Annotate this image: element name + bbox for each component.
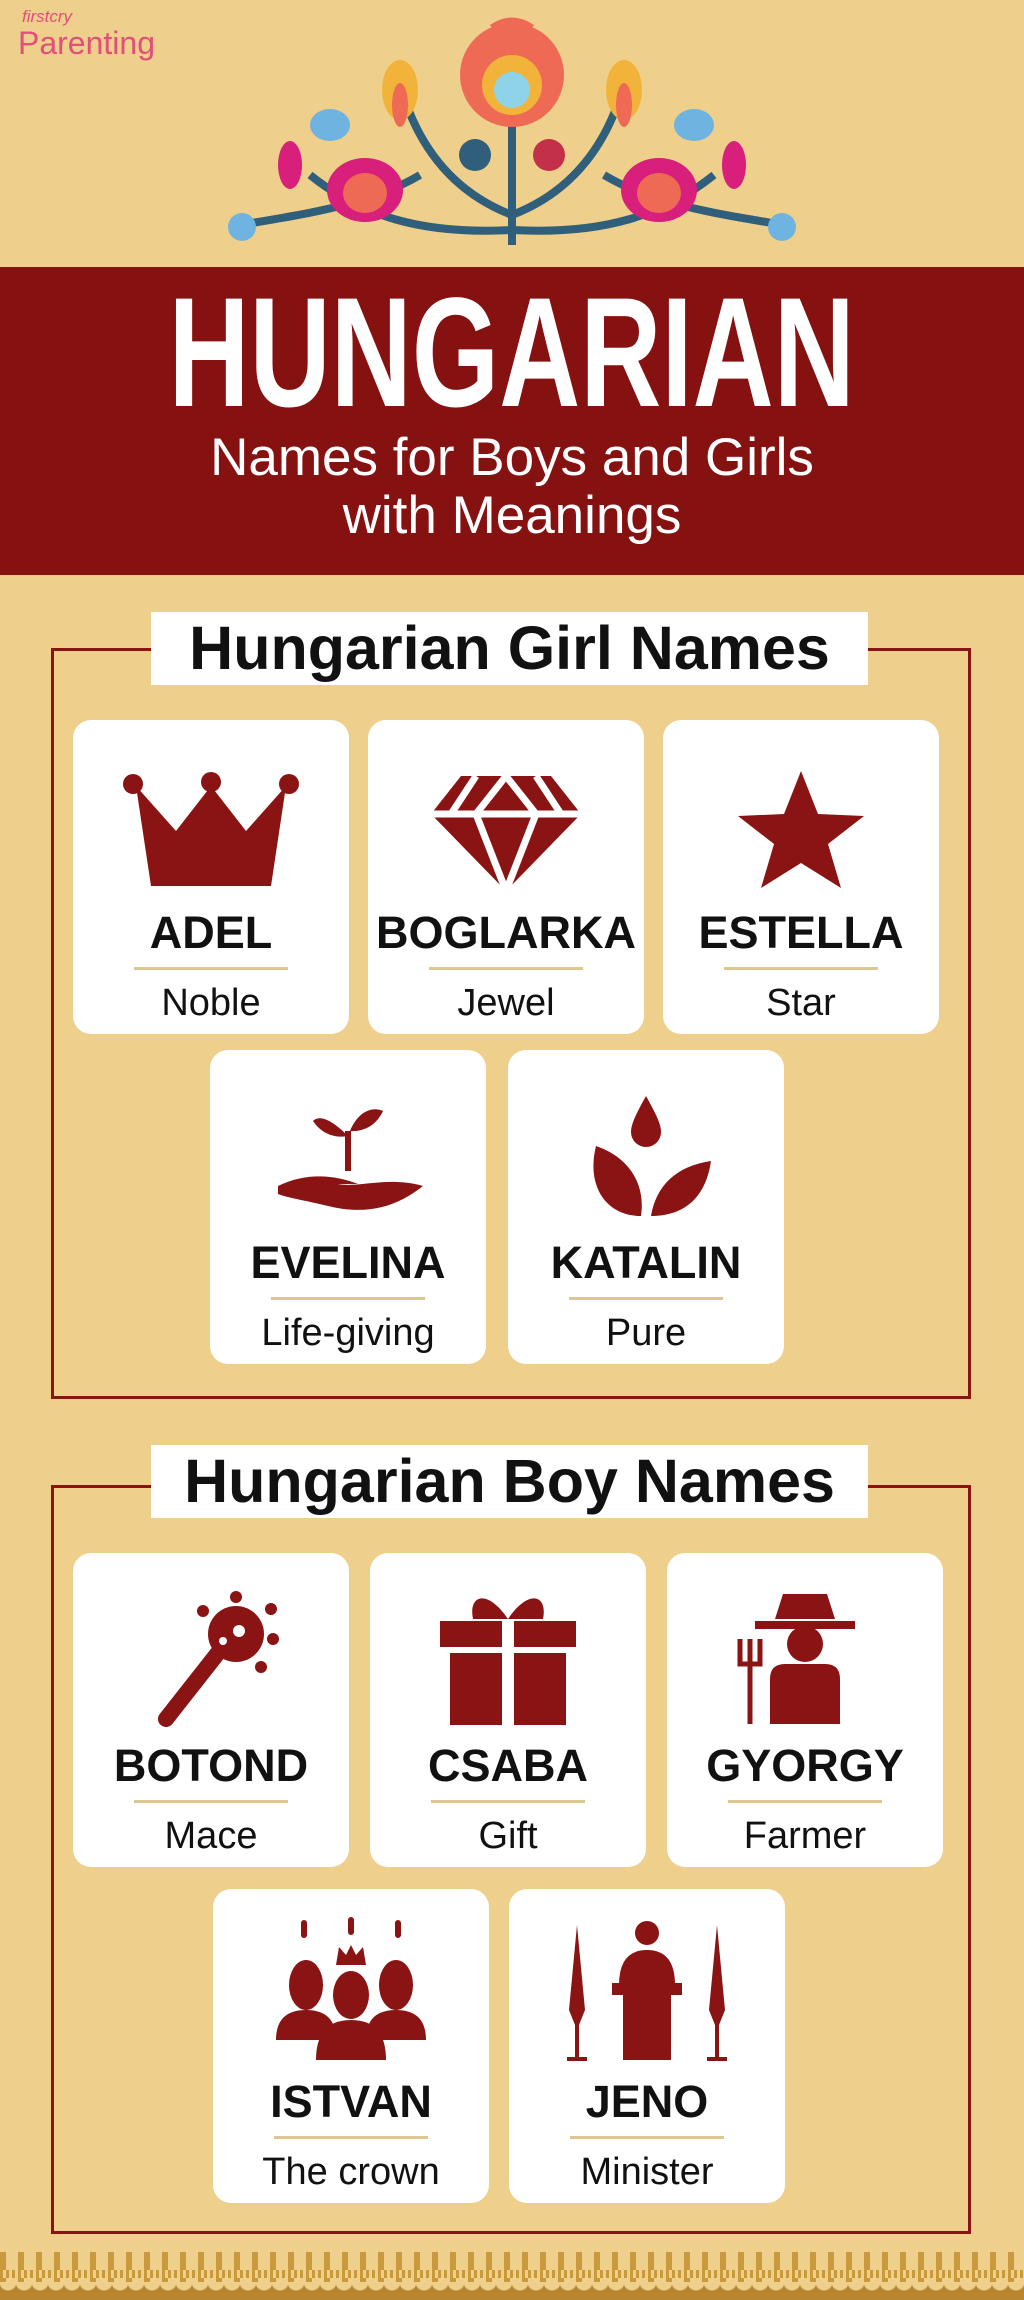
- card: BOGLARKA: [368, 720, 644, 1034]
- card: ESTELLA: [663, 720, 939, 1034]
- card: CSABA: Gift: [478, 1815, 538, 1857]
- card: BOTOND: BOTOND: [114, 1740, 308, 1791]
- card: BOGLARKA: BOGLARKA: [376, 907, 636, 958]
- card: BOTOND: [73, 1553, 349, 1867]
- subtitle: with Meanings: [343, 486, 681, 545]
- card: KATALIN: KATALIN: [551, 1237, 741, 1288]
- logo: firstcry: [22, 7, 72, 26]
- heading: boy names: Hungarian Boy Names: [184, 1447, 835, 1515]
- subtitle: [210, 428, 814, 545]
- logo: [18, 7, 155, 61]
- card: EVELINA: Life-giving: [261, 1312, 435, 1354]
- card: BOGLARKA: Jewel: [457, 982, 555, 1024]
- floral ornament: [228, 18, 796, 245]
- panel: girl names: [51, 648, 971, 1399]
- title: HUNGARIAN: [169, 266, 855, 440]
- card: GYORGY: [667, 1553, 943, 1867]
- card: JENO: [509, 1889, 785, 2203]
- card: EVELINA: EVELINA: [250, 1237, 446, 1288]
- card: ESTELLA: ESTELLA: [698, 907, 904, 958]
- subtitle: Names for Boys and Girls: [210, 428, 814, 487]
- card: EVELINA: [210, 1050, 486, 1364]
- heading: girl names: Hungarian Girl Names: [189, 614, 830, 682]
- card: ADEL: Noble: [161, 982, 261, 1024]
- card: ISTVAN: [213, 1889, 489, 2203]
- card: ADEL: [73, 720, 349, 1034]
- card: GYORGY: Farmer: [744, 1815, 866, 1857]
- card: ADEL: ADEL: [150, 907, 272, 958]
- card: GYORGY: GYORGY: [706, 1740, 904, 1791]
- card: KATALIN: [508, 1050, 784, 1364]
- card: CSABA: CSABA: [428, 1740, 588, 1791]
- card: ISTVAN: The crown: [262, 2151, 440, 2193]
- card: CSABA: [370, 1553, 646, 1867]
- title banner: [0, 267, 1024, 575]
- card: ESTELLA: Star: [766, 982, 836, 1024]
- card: BOTOND: Mace: [165, 1815, 257, 1857]
- panel: boy names: [51, 1485, 971, 2234]
- card: ISTVAN: ISTVAN: [270, 2076, 432, 2127]
- footer border pattern: [0, 2252, 1024, 2300]
- card: JENO: JENO: [586, 2076, 708, 2127]
- card: JENO: Minister: [580, 2151, 714, 2193]
- logo: Parenting: [18, 25, 155, 61]
- card: KATALIN: Pure: [606, 1312, 686, 1354]
